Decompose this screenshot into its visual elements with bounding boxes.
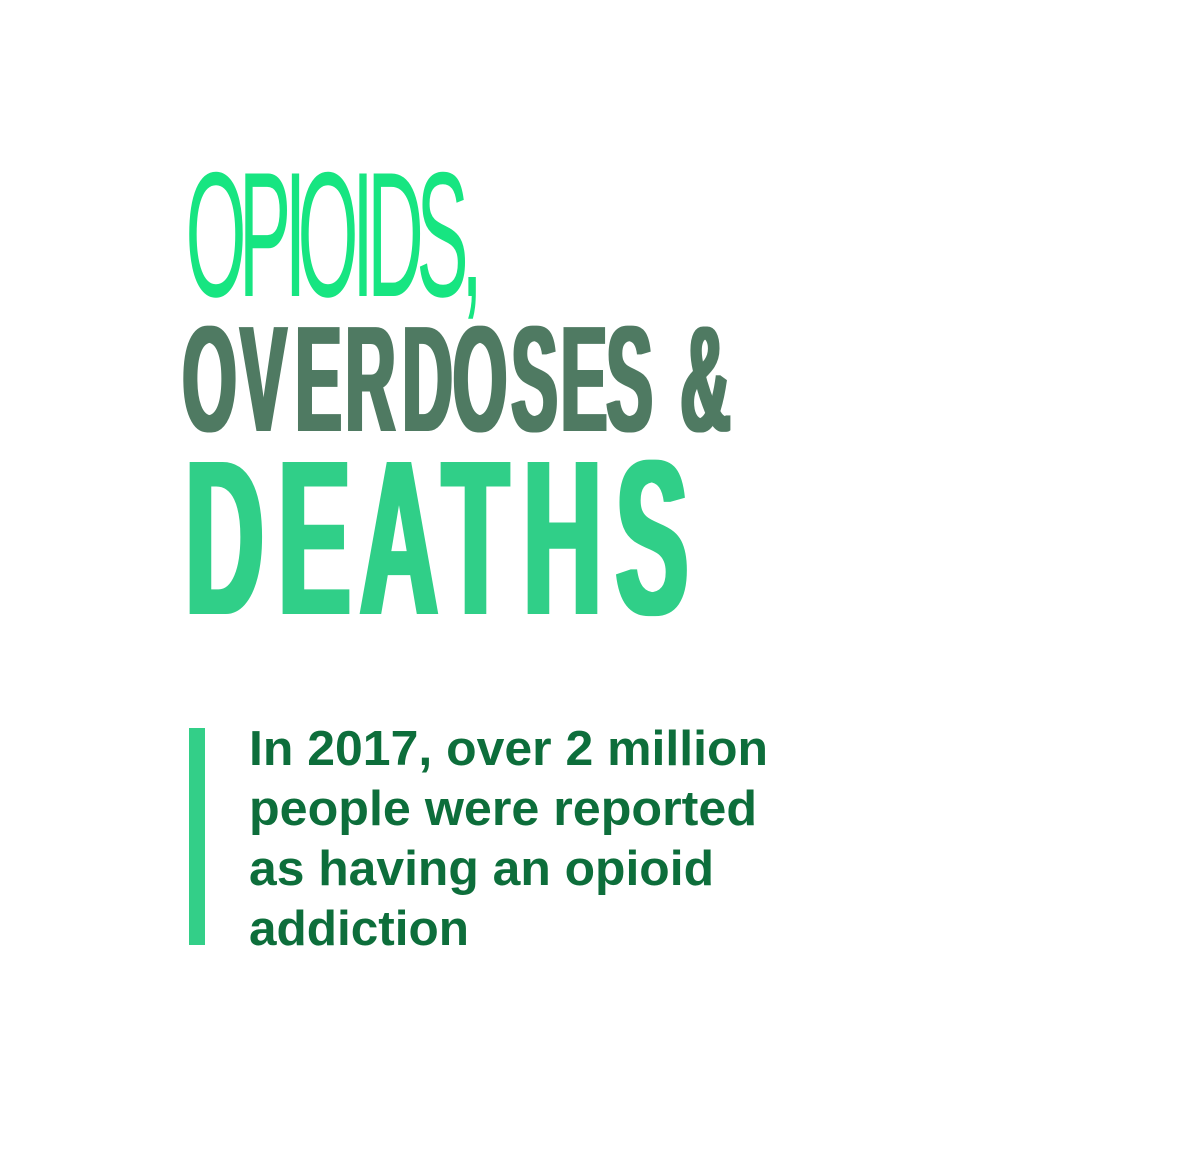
callout text: as having an opioid bbox=[249, 842, 714, 896]
callout text: people were reported bbox=[249, 782, 757, 836]
callout text: In 2017, over 2 million bbox=[249, 722, 768, 776]
title bbox=[182, 137, 731, 661]
callout bbox=[189, 722, 768, 956]
callout text: addiction bbox=[249, 902, 469, 956]
title line: Opioids: OPIOIDS, bbox=[186, 137, 483, 335]
callout text bbox=[249, 722, 768, 956]
title line: Deaths: DEATHS bbox=[185, 413, 688, 661]
title line: Overdoses: OVERDOSES & bbox=[182, 295, 731, 463]
callout accent bar bbox=[189, 728, 205, 945]
